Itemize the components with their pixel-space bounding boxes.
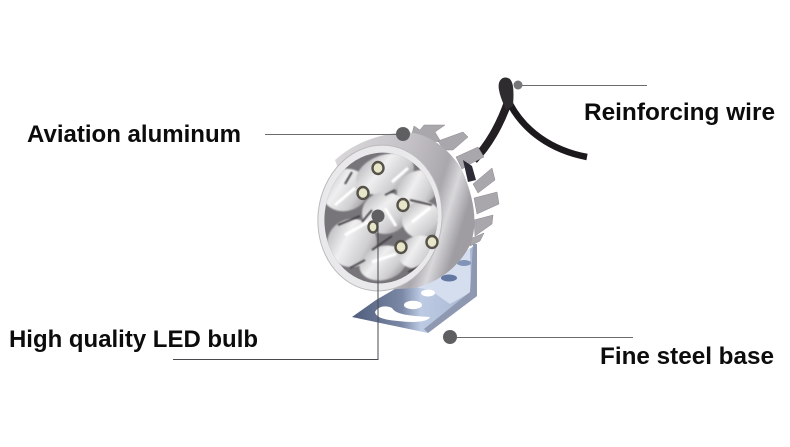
leader line bbox=[520, 84, 647, 86]
reflector lenses bbox=[326, 153, 438, 282]
leader line bbox=[173, 216, 378, 360]
marker dot bbox=[372, 210, 384, 222]
aluminum housing bbox=[335, 132, 474, 290]
callout: High quality LED bulb bbox=[9, 210, 384, 360]
reflector cavity bbox=[324, 152, 438, 284]
steel base bracket bbox=[352, 244, 477, 333]
front ring bbox=[311, 139, 449, 297]
callout: Fine steel base bbox=[443, 330, 774, 370]
heading: Reinforcing wire: Reinforcing wire bbox=[584, 99, 775, 126]
lens highlights and creases bbox=[335, 168, 432, 272]
leader line bbox=[456, 336, 633, 338]
marker dot bbox=[396, 127, 410, 141]
dark rear connector bbox=[463, 160, 476, 182]
heading: Fine steel base: Fine steel base bbox=[600, 343, 774, 370]
marker dot bbox=[514, 80, 522, 90]
heading: High quality LED bulb: High quality LED bulb bbox=[9, 326, 258, 353]
marker dot bbox=[443, 330, 457, 344]
reinforcing wire cable bbox=[474, 78, 587, 160]
callout: Aviation aluminum bbox=[27, 121, 410, 148]
icon: LED light product bbox=[311, 78, 587, 333]
heading: Aviation aluminum: Aviation aluminum bbox=[27, 121, 241, 148]
callout: Reinforcing wire bbox=[514, 80, 775, 126]
LED chips bbox=[358, 162, 438, 253]
leader line bbox=[265, 134, 396, 136]
heat sink fins bbox=[412, 125, 499, 246]
